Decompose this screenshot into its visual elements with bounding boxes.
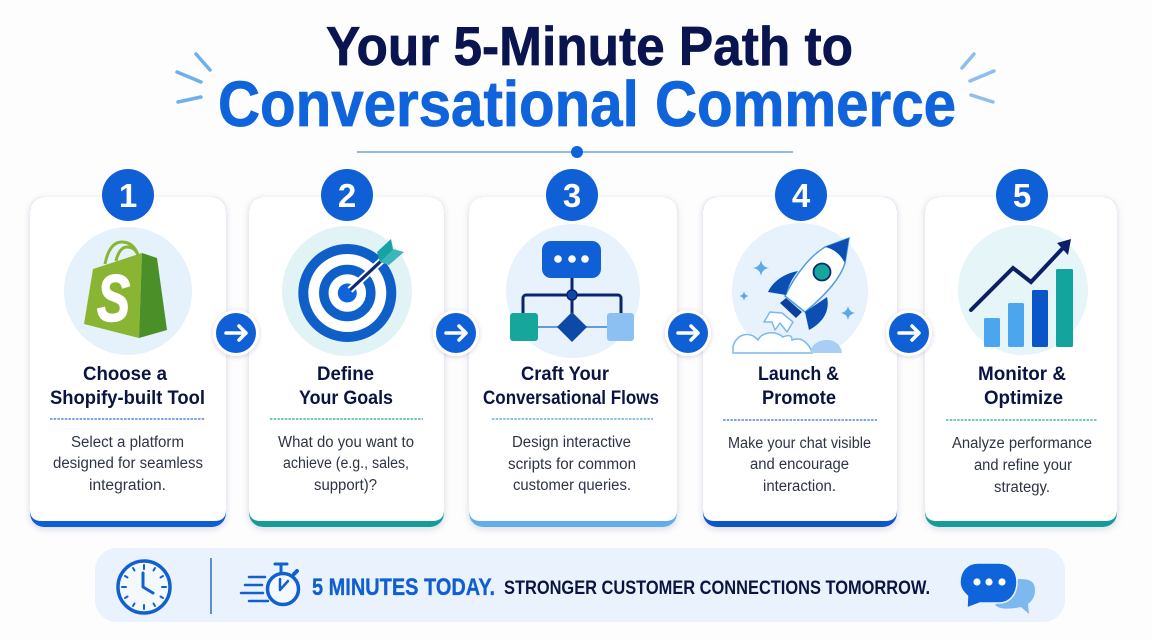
step heading: Monitor & [978,363,1066,385]
step number [775,169,827,221]
step heading [483,363,659,409]
panel: step 4 [703,169,897,527]
arrow: step 3 to 4 [665,310,711,356]
step number: 5 [1013,177,1031,214]
step number: 3 [563,177,581,214]
step description: interaction. [763,478,836,495]
panel: step 1 [30,169,226,527]
step description: customer queries. [513,477,631,494]
panel: step 5 [925,169,1117,527]
icon: clock [118,561,170,613]
card [249,197,444,527]
banner message [312,574,930,601]
step heading: Define [317,363,374,385]
step number [546,169,598,221]
icon: shopify bag [64,227,192,355]
step number [321,169,373,221]
card [30,197,226,527]
title: Conversational Commerce [218,68,956,140]
arrow: step 4 to 5 [886,310,932,356]
step heading: Conversational Flows [483,387,659,409]
title [218,15,956,140]
step number: 4 [792,177,811,214]
step heading: Your Goals [299,387,393,409]
card [925,197,1117,527]
step heading: Promote [762,387,836,409]
step description [278,434,414,494]
icon: stopwatch [241,564,298,604]
panel: step 2 [249,169,444,527]
panel: bottom banner [95,548,1065,622]
step description: strategy. [994,479,1050,496]
arrow: step 2 to 3 [433,310,479,356]
step description: Select a platform [71,434,184,451]
step description [53,434,203,494]
step description [728,435,871,495]
step heading [978,363,1066,409]
title divider [357,146,793,158]
step description [952,435,1092,496]
step description: scripts for common [508,456,636,473]
step heading [758,363,839,409]
step description: and encourage [750,456,849,473]
title: Your 5-Minute Path to [326,15,853,77]
panel: step 3 [469,169,677,527]
step description: What do you want to [278,434,414,451]
card [469,197,677,527]
step heading [50,363,205,409]
step heading: Choose a [83,363,167,385]
step description: integration. [89,477,166,494]
step description [508,434,636,494]
step number [996,169,1048,221]
step description: Make your chat visible [728,435,871,452]
icon: target with arrow [282,226,412,356]
step description: designed for seamless [53,455,203,472]
banner message: STRONGER CUSTOMER CONNECTIONS TOMORROW. [504,577,930,599]
step heading: Optimize [984,387,1063,409]
icon: growth chart [958,225,1088,355]
step heading: Craft Your [521,363,609,385]
step description: support)? [314,477,377,494]
card [703,197,897,527]
step number [102,169,154,221]
step description: Design interactive [512,434,631,451]
arrow: step 1 to 2 [213,310,259,356]
step heading [299,363,393,409]
accent sparks left [177,54,210,102]
step description: Analyze performance [952,435,1092,452]
icon: chat bubbles [960,563,1035,614]
accent sparks right [962,54,994,102]
step description: and refine your [974,457,1072,474]
icon: shopify bag: S [97,261,130,335]
step heading: Shopify-built Tool [50,387,205,409]
step number: 2 [338,177,356,214]
step description: achieve (e.g., sales, [283,455,409,472]
icon: rocket launch [732,223,868,353]
step number: 1 [119,177,137,214]
icon: conversation flow chart [506,224,640,358]
banner message: 5 MINUTES TODAY. [312,574,495,601]
step heading: Launch & [758,363,839,385]
